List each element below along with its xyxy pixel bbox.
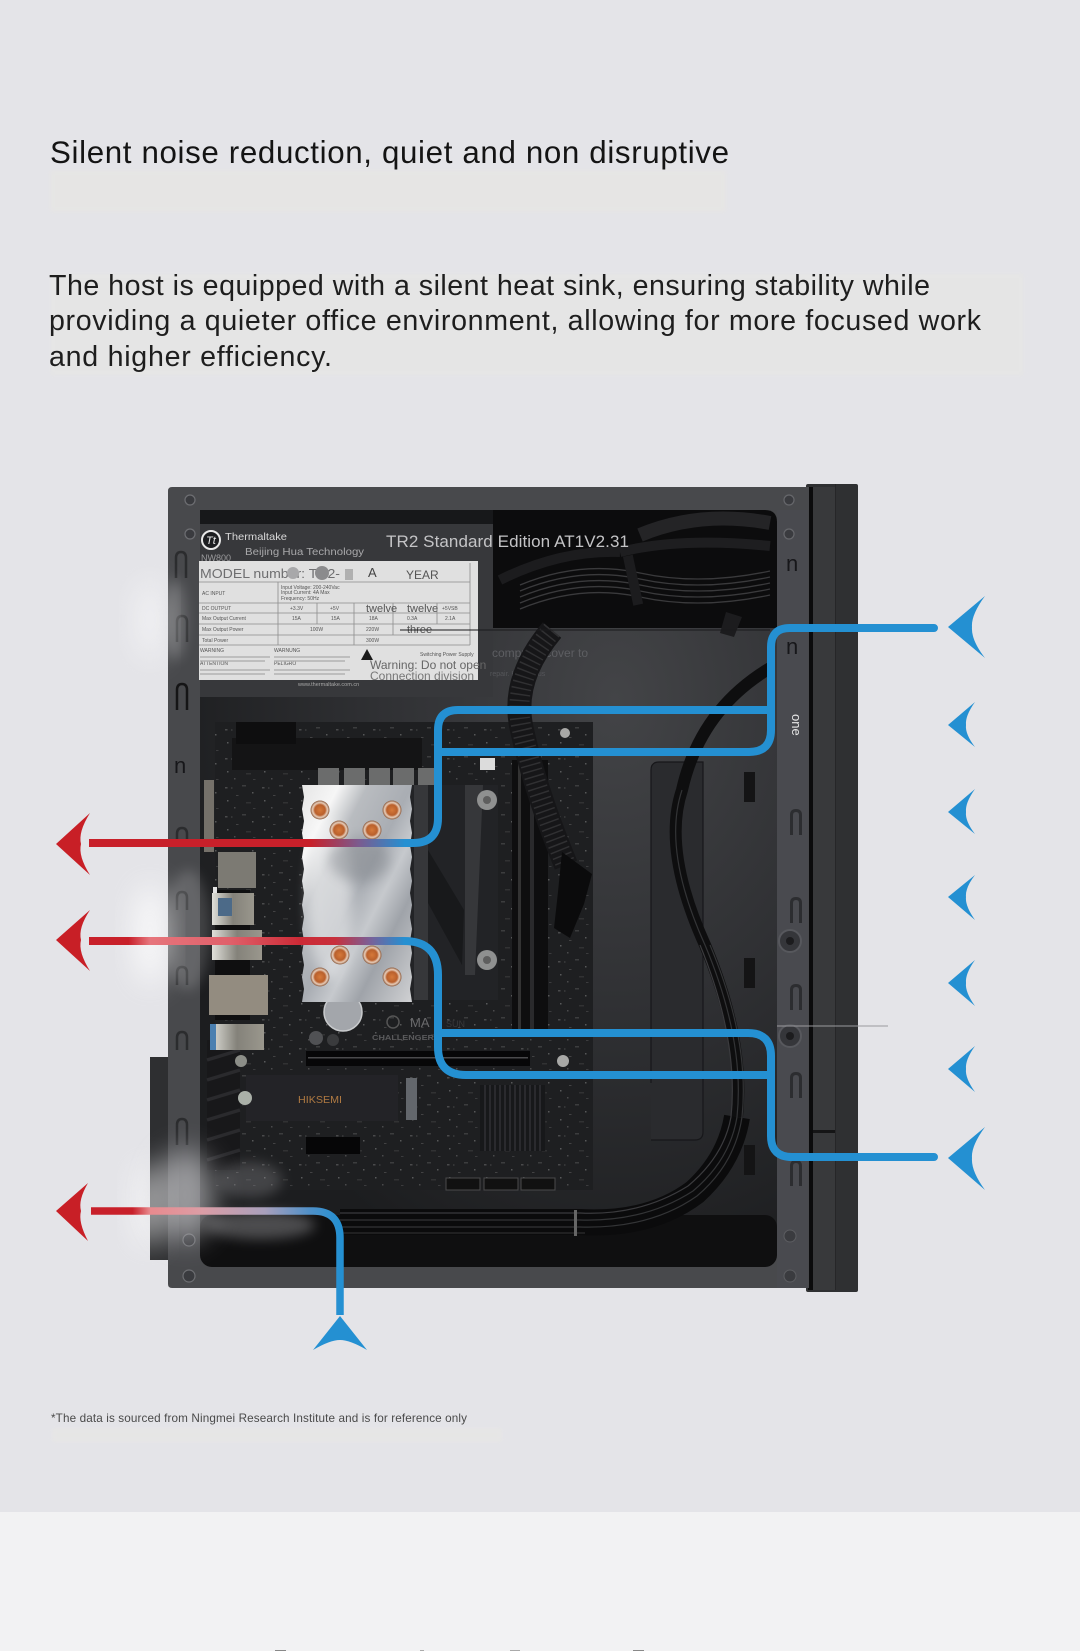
arrow: blue inlet large bottom: [948, 1127, 985, 1190]
case letters: n: [174, 753, 186, 778]
lower cable bundle: [340, 668, 770, 1236]
PSU header text: Tt: [206, 535, 217, 547]
arrow: blue inlet 5: [948, 960, 975, 1006]
PSU label: AC INPUT: [202, 591, 225, 597]
SATA ports: [446, 1178, 555, 1190]
thin overlay lines: [400, 630, 888, 1026]
PSU label: 15A: [331, 616, 341, 622]
motherboard: [204, 722, 593, 1190]
arrow: blue inlet bottom: [313, 1316, 367, 1350]
VRM chokes: [318, 768, 439, 785]
case frame: [168, 487, 809, 1288]
case interior: [200, 510, 777, 1267]
CPU fan: [410, 758, 498, 1000]
mainboard brand: [372, 1015, 465, 1042]
smoke: [134, 580, 315, 1247]
PSU label: three: [407, 624, 432, 636]
PSU label: Input Current: 4A Max: [281, 590, 330, 596]
inner panel outline: [651, 762, 703, 1140]
PSU label: +5VSB: [442, 606, 458, 612]
PSU label: 0.3A: [407, 616, 418, 622]
PSU label: ATTENTION: [200, 661, 228, 667]
PCIe x1 slot: [306, 1137, 360, 1154]
body text: and higher efficiency.: [49, 341, 332, 373]
braided power cable: [519, 630, 592, 938]
arrow: blue inlet 4: [948, 875, 975, 920]
CMOS battery: [324, 993, 362, 1031]
PSU label: 15A: [292, 616, 302, 622]
intake path bottom: [438, 1033, 934, 1157]
arrow: red outlet 3: [56, 1183, 88, 1241]
left rail slots: [176, 552, 187, 1145]
M.2 SSD: [235, 1055, 417, 1121]
PSU header text: [201, 531, 364, 563]
expansion bracket: [150, 1057, 170, 1260]
PSU header text: Beijing Hua Technology: [245, 547, 364, 558]
arrow: blue inlet 6: [948, 1046, 975, 1092]
PSU label: Connection division: [370, 669, 474, 683]
PSU label: Warning: Do not open: [370, 658, 486, 672]
M.2 SSD: HIKSEMI: [298, 1094, 342, 1106]
PSU label: 2.1A: [445, 616, 456, 622]
PSU label: Max Output Current: [202, 616, 247, 622]
power cable chamber: [493, 510, 777, 637]
PSU label: WARNING: [200, 648, 224, 654]
right rail: [777, 495, 808, 1288]
intake path top: [438, 628, 934, 752]
exhaust path lower: [89, 941, 771, 1075]
airflow lines: [89, 628, 934, 1315]
mainboard brand: CHALLENGER: [372, 1033, 435, 1042]
footnote: [51, 1412, 502, 1442]
PSU label: Total Power: [202, 638, 228, 644]
PSU label: Switching Power Supply: [420, 652, 474, 658]
footnote: *The data is sourced from Ningmei Research Institute and is for reference only: [51, 1412, 467, 1425]
PSU label: MODEL number: TR2-: [200, 566, 340, 581]
PSU: computer cover to: [492, 646, 588, 660]
RAM slots: [512, 760, 548, 1030]
mainboard brand: SUN: [446, 1019, 465, 1029]
exhaust path upper: [89, 710, 771, 843]
PSU label: 220W: [366, 627, 379, 633]
case side panel: [806, 484, 858, 1292]
chipset heatsink: [480, 1085, 545, 1151]
title: Silent noise reduction, quiet and non disruptive: [50, 135, 729, 170]
body text: The host is equipped with a silent heat sink, ensuring stability while: [49, 270, 930, 302]
PSU label: Frequency: 50Hz: [281, 596, 320, 602]
PSU label: [199, 561, 486, 683]
model caption: TR2 Standard Edition AT1V2.31: [386, 532, 629, 551]
computer case: [134, 484, 888, 1292]
mainboard brand: MA: [410, 1015, 430, 1030]
PSU label: WARNUNG: [274, 648, 300, 654]
PSU label: +3.3V: [290, 606, 304, 612]
body text: [49, 270, 1024, 376]
PSU label: YEAR: [406, 568, 439, 582]
PSU label: A: [368, 565, 377, 580]
IO ports: [204, 780, 268, 1050]
arrow: red outlet 2: [56, 910, 90, 971]
exhaust path bottom: [91, 1211, 340, 1315]
case letters: n: [786, 634, 798, 659]
PSU label: DC OUTPUT: [202, 606, 231, 612]
PSU label: 300W: [366, 638, 379, 644]
PSU label: Input Voltage: 200-240Vac: [281, 585, 340, 591]
CPU cooler heatsink: [302, 785, 412, 1002]
PSU header text: NW800: [201, 553, 231, 563]
PSU label: PELIGRO: [274, 661, 296, 667]
arrow: blue inlet large top: [948, 596, 985, 658]
case letters: one: [789, 714, 804, 736]
case letters: [174, 551, 804, 778]
body text: providing a quieter office environment, allowing for more focused work: [49, 305, 982, 337]
PSU label: 100W: [310, 627, 323, 633]
mounting screws: [557, 728, 570, 1067]
PSU header text: Thermaltake: [225, 531, 287, 543]
PSU label: 18A: [369, 616, 379, 622]
rear cut-outs: [744, 772, 755, 1175]
PSU label: +5V: [330, 606, 340, 612]
PSU: www.thermaltake.com.cn: [297, 682, 359, 688]
PSU label: twelve: [366, 603, 397, 615]
bottom shroud: [200, 1215, 777, 1267]
title: [50, 135, 729, 212]
arrow: blue inlet 3: [948, 789, 975, 834]
arrow: red outlet 1: [56, 813, 90, 875]
arrow: blue inlet 2: [948, 702, 975, 747]
case letters: n: [786, 551, 798, 576]
corner screws: [183, 495, 195, 1282]
footer band: [0, 1512, 1080, 1651]
PSU label: Max Output Power: [202, 627, 244, 633]
PSU label: twelve: [407, 603, 438, 615]
PCIe slot: [306, 1051, 530, 1066]
PSU: repair. Hazardous: [490, 671, 546, 678]
PSU: [199, 510, 588, 697]
